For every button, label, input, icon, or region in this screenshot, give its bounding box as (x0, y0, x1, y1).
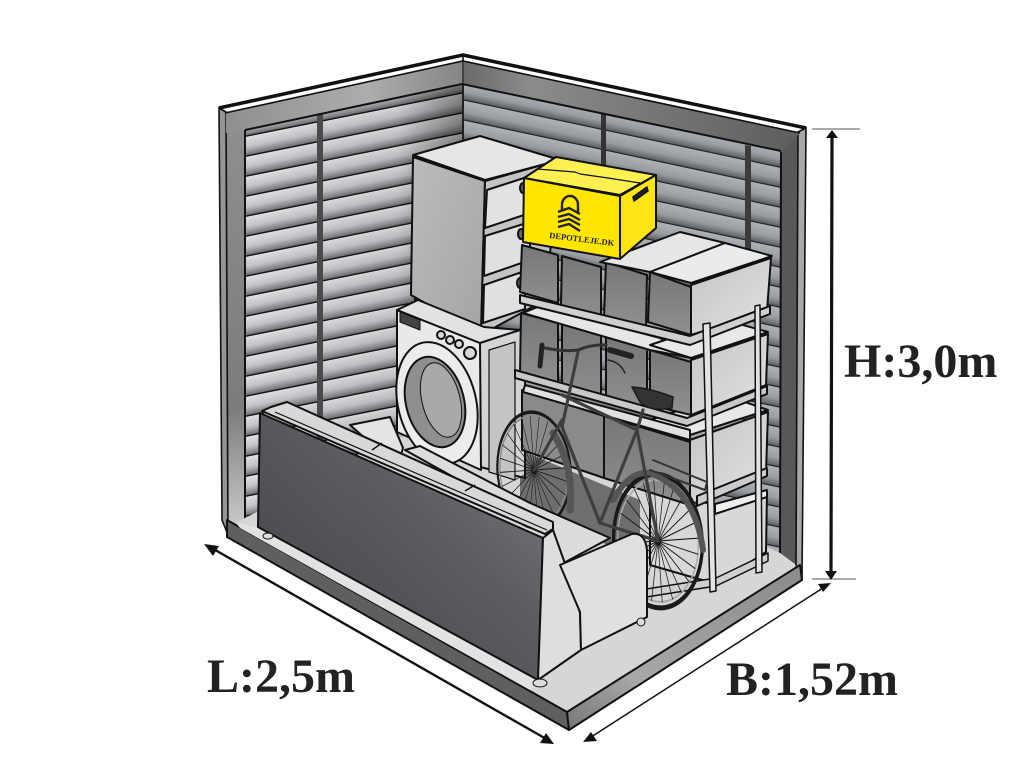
front wheel (494, 410, 574, 530)
sofa feet (263, 533, 645, 687)
row 2 shelf (515, 370, 767, 426)
unit walls (219, 55, 806, 580)
sofa top rim (262, 402, 553, 534)
sofa arm (560, 534, 647, 650)
row 3 shelf (523, 385, 767, 506)
logo text: DEPOTLEJE.DK (549, 230, 615, 248)
floor front edge right (567, 565, 802, 730)
row 4 shelf (640, 553, 768, 598)
right post (780, 128, 806, 580)
seat cushion behind (350, 417, 610, 565)
logo (558, 196, 580, 231)
storage shelf with boxes (515, 232, 772, 598)
height arrow (812, 129, 860, 580)
left post (219, 108, 245, 535)
rear rack (650, 460, 707, 490)
left wall slats (245, 84, 462, 530)
handlebar (545, 345, 606, 351)
sofa side (538, 530, 581, 680)
fenders (553, 433, 571, 510)
washing machine (384, 300, 525, 480)
sofa back face (258, 413, 543, 680)
floor (227, 405, 802, 730)
back wall slats (463, 84, 781, 560)
row 4 boxes (650, 490, 767, 584)
label: length: L:2,5m (207, 650, 355, 703)
yellow box (523, 157, 656, 259)
row 2 boxes (520, 306, 768, 415)
bicycle (494, 345, 707, 611)
row 3 boxes (522, 390, 768, 505)
label: width: B:1,52m (726, 653, 898, 706)
dresser (411, 136, 560, 346)
row 1 shelf (520, 295, 770, 345)
rear wheel (609, 471, 707, 611)
label: height: H:3,0m (844, 335, 997, 388)
sofa (258, 402, 647, 687)
floor front edge left (227, 520, 569, 730)
width arrow (583, 583, 831, 742)
top frame (219, 55, 806, 152)
length arrow (204, 544, 554, 744)
frame (534, 352, 658, 541)
shelf uprights (703, 305, 762, 592)
row 1 boxes (520, 232, 772, 335)
saddle (632, 387, 673, 409)
